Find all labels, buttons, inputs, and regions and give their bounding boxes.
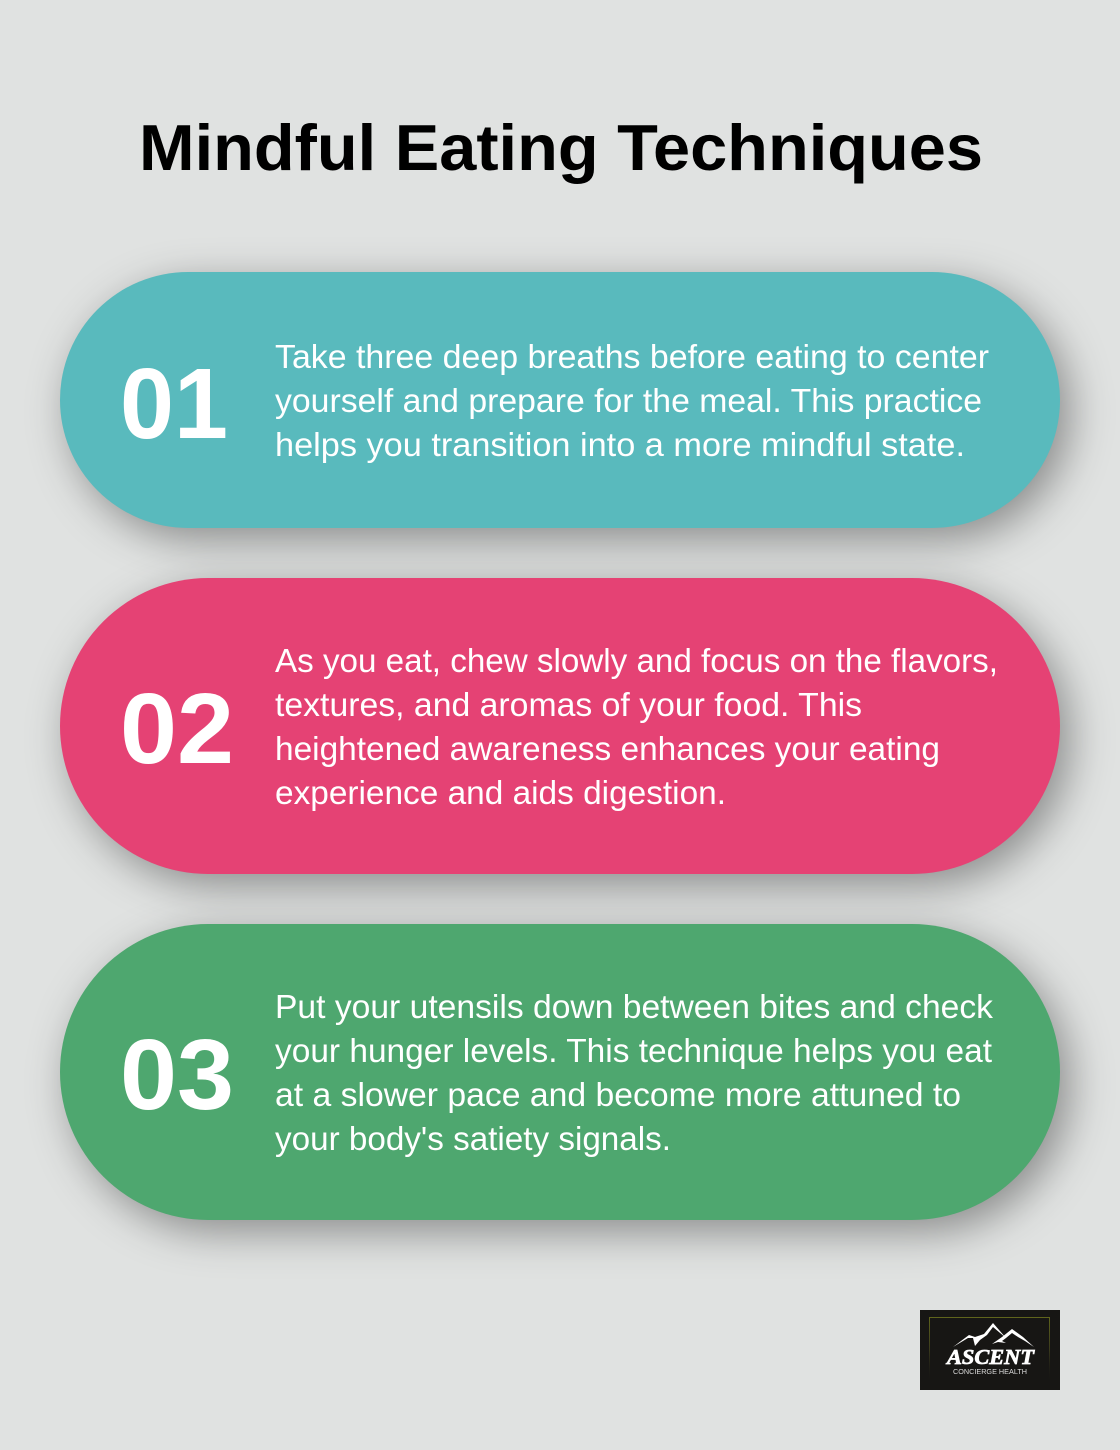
text: step 02 description: experience and aids digestion. <box>275 775 726 812</box>
logo wordmark: ASCENT <box>945 1345 1035 1369</box>
logo tagline: CONCIERGE HEALTH <box>953 1367 1027 1376</box>
number: 03: 03 <box>120 1019 234 1131</box>
text: step 02 description: textures, and aromas of your food. This <box>275 687 862 724</box>
text: step 02 description <box>275 643 998 812</box>
title: Mindful Eating Techniques <box>139 111 983 184</box>
text: step 01 description <box>275 339 989 464</box>
text: step 03 description: at a slower pace and become more attuned to <box>275 1077 961 1114</box>
text: step 02 description: heightened awareness enhances your eating <box>275 731 940 768</box>
number: 02: 02 <box>120 673 234 785</box>
text: step 03 description <box>275 989 993 1158</box>
text: step 01 description: Take three deep breaths before eating to center <box>275 339 989 376</box>
panel: step 03 <box>60 924 1070 1232</box>
icon: mountains <box>953 1323 1034 1347</box>
panel: step 01 <box>60 272 1070 540</box>
text: step 01 description: helps you transition into a more mindful state. <box>275 427 965 464</box>
text: step 03 description: your hunger levels. This technique helps you eat <box>275 1033 993 1070</box>
text: step 03 description: Put your utensils down between bites and check <box>275 989 993 1026</box>
panel: step 02 <box>60 578 1070 886</box>
logo: Ascent Concierge Health <box>920 1310 1060 1390</box>
text: step 01 description: yourself and prepare for the meal. This practice <box>275 383 982 420</box>
text: step 02 description: As you eat, chew slowly and focus on the flavors, <box>275 643 998 680</box>
number: 01: 01 <box>120 348 228 460</box>
text: step 03 description: your body's satiety signals. <box>275 1121 671 1158</box>
